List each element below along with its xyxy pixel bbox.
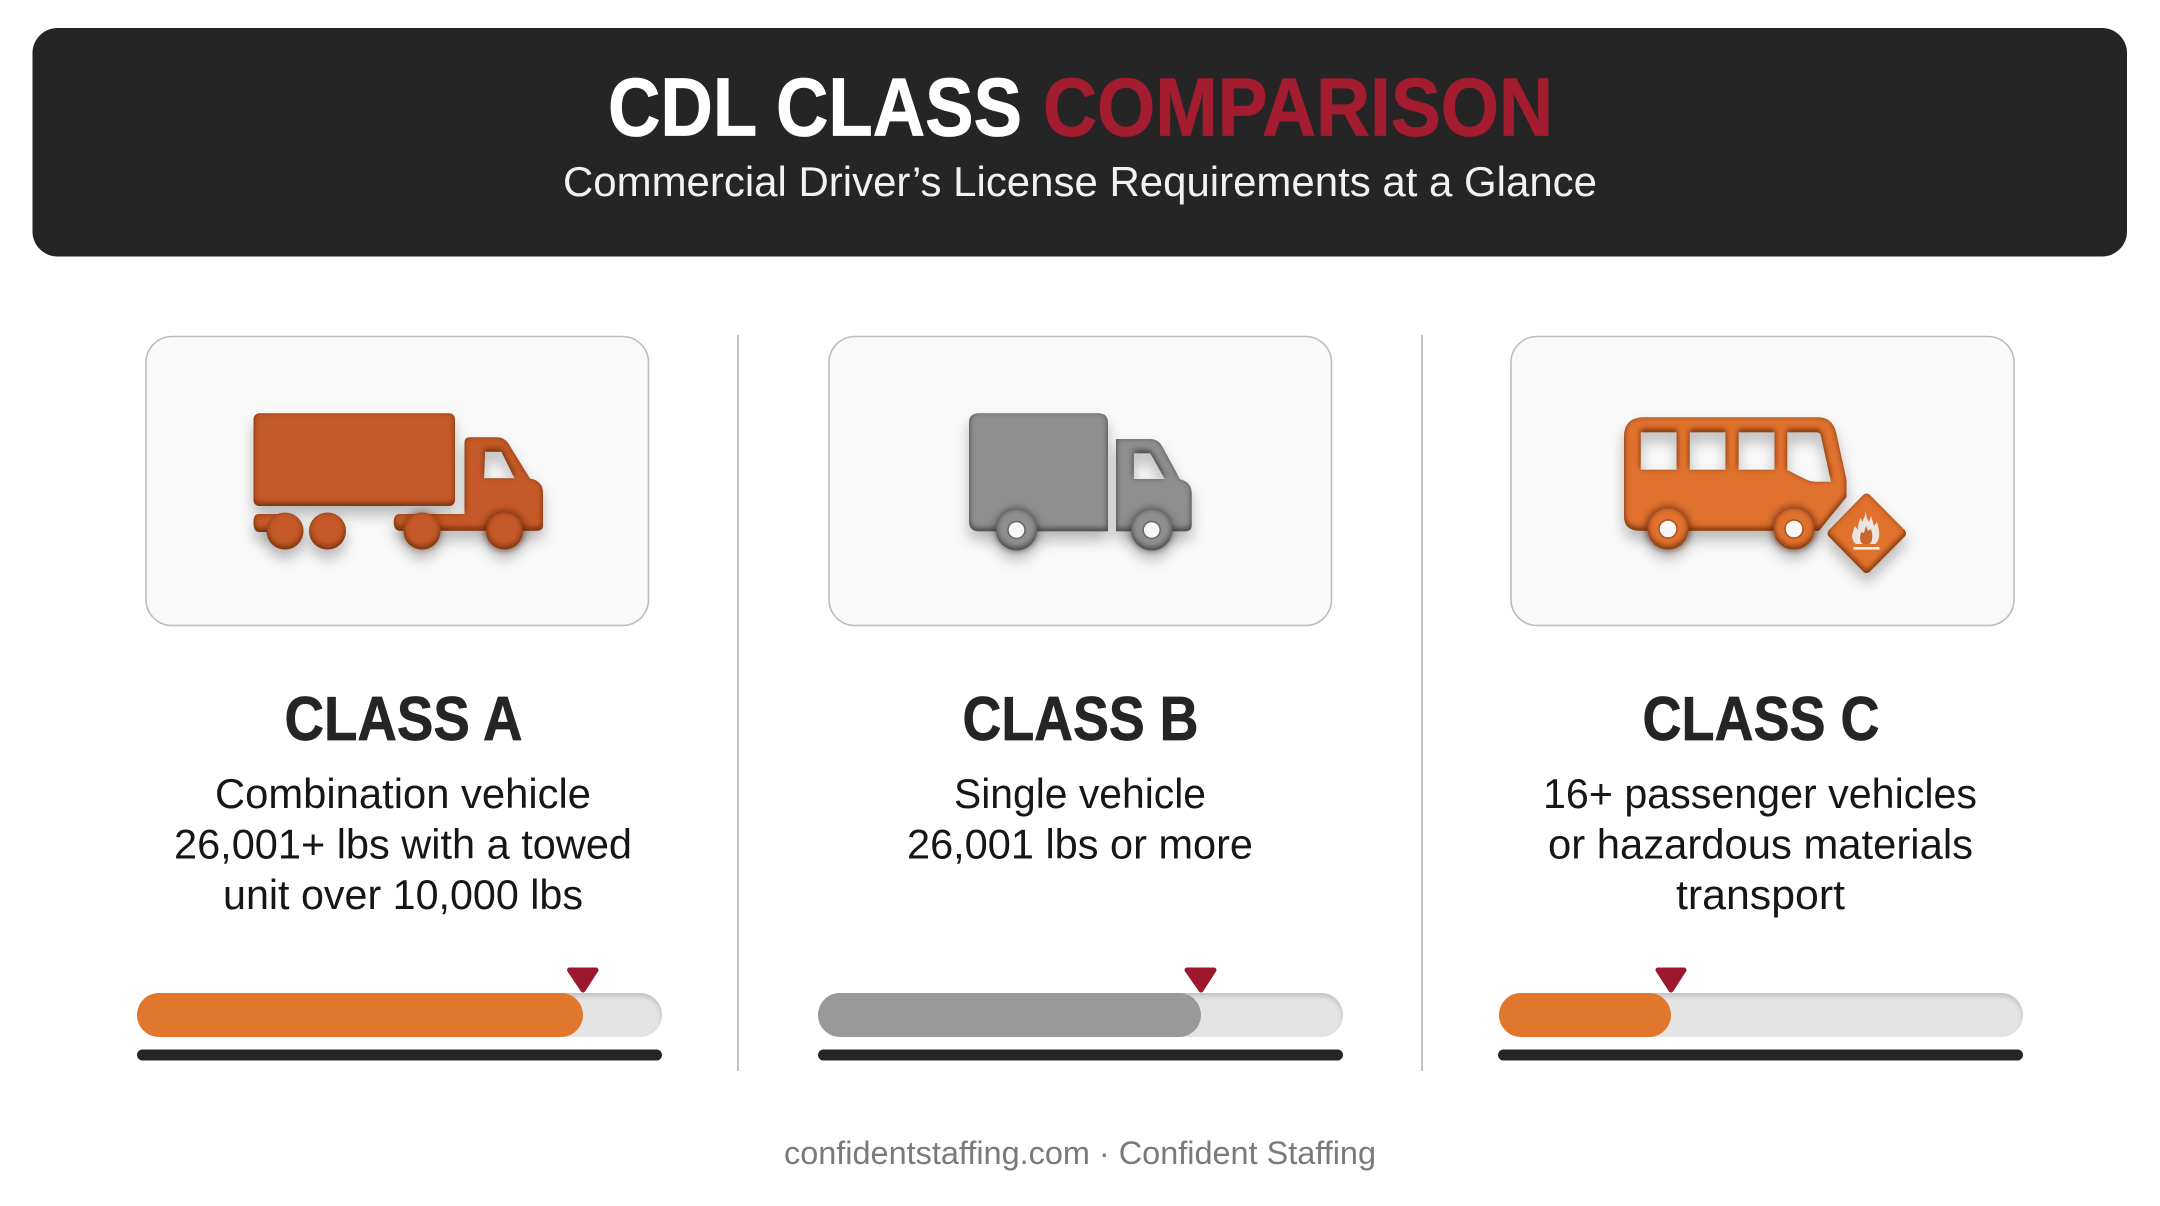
header banner [32,28,2127,256]
icon: hazmat flammable diamond [1832,498,1902,568]
footer credit: confidentstaffing.com · Confident Staffing [784,1135,1376,1171]
title accent: COMPARISON [1043,60,1553,154]
title: CDL CLASS [608,60,1022,154]
class B description [907,770,1253,868]
class A description: unit over 10,000 lbs [223,871,583,918]
class B description: Single vehicle [954,770,1206,817]
class A description [174,770,632,918]
class C heading: CLASS C [1642,685,1880,754]
icon: passenger bus [1624,417,1846,551]
class A heading: CLASS A [284,685,522,754]
panel: class A [137,336,662,1060]
class A description: 26,001+ lbs with a towed [174,820,632,868]
class C description: transport [1676,871,1845,918]
icon card B [829,336,1332,626]
column divider left [737,335,739,1071]
class C description [1543,770,1977,918]
class C meter [1498,970,2023,1060]
class B description: 26,001 lbs or more [907,820,1253,868]
class A meter [137,970,662,1060]
class B heading: CLASS B [962,685,1198,754]
icon card C [1511,336,2014,626]
icon: box truck [969,413,1192,551]
class C description: or hazardous materials [1548,820,1973,868]
panel: class C [1498,336,2023,1060]
class A description: Combination vehicle [215,770,591,817]
icon: tractor trailer truck [254,413,543,551]
panel: class B [818,336,1343,1060]
icon card A [146,336,648,626]
class C description: 16+ passenger vehicles [1543,770,1977,817]
column divider right [1421,335,1423,1071]
class B meter [818,970,1343,1060]
subtitle: Commercial Driver’s License Requirements at a Glance [563,158,1597,205]
